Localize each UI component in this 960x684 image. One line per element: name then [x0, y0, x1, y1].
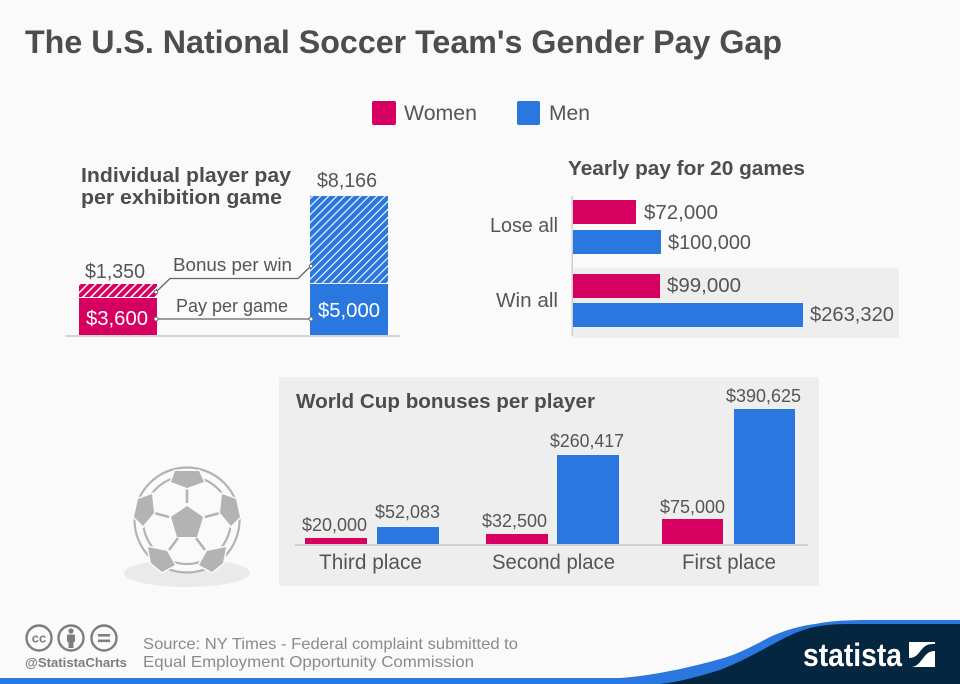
- men stacked bar: $5,000: [318, 300, 380, 322]
- heading: exhibition game: per exhibition game: [81, 187, 282, 209]
- legend: [372, 101, 590, 125]
- callout: bonus per win: Bonus per win: [173, 255, 292, 275]
- heading: exhibition game: Individual player pay: [81, 165, 292, 187]
- title: The U.S. National Soccer Team's Gender Pay Gap: [25, 24, 782, 60]
- women stacked bar: $1,350: [85, 261, 145, 283]
- panel: yearly pay for 20 games: [490, 158, 899, 338]
- row: lose all: $72,000: [644, 202, 718, 224]
- row: lose all: Lose all: [490, 215, 558, 237]
- group: first place: First place: [682, 551, 776, 574]
- footer: source: Source: NY Times - Federal complaint submitted to: [143, 636, 518, 653]
- men stacked bar: $8,166: [317, 170, 377, 192]
- group: second place: [482, 431, 624, 574]
- group: second place: Second place: [492, 551, 615, 574]
- women stacked bar: $3,600: [86, 308, 148, 330]
- callout: bonus per win: [154, 255, 313, 294]
- group: third place: [302, 502, 440, 574]
- row: win all: Win all: [496, 290, 558, 312]
- heading: yearly pay: Yearly pay for 20 games: [568, 158, 805, 180]
- row: win all: $263,320: [810, 304, 894, 326]
- group: second place: $32,500: [482, 511, 547, 531]
- row: lose all: [490, 200, 751, 254]
- group: third place: $20,000: [302, 515, 367, 535]
- heading: exhibition game: [81, 165, 292, 209]
- footer: creative commons icons: [26, 626, 116, 650]
- group: first place: $390,625: [726, 386, 801, 406]
- men stacked bar: [310, 170, 388, 335]
- row: lose all: $100,000: [668, 232, 751, 254]
- group: third place: $52,083: [375, 502, 440, 522]
- logo: statista: statista: [803, 637, 902, 673]
- legend: Men: [549, 102, 590, 125]
- footer: brand band: [0, 620, 960, 684]
- group: first place: [660, 386, 801, 574]
- group: first place: $75,000: [660, 497, 725, 517]
- panel: world cup bonuses per player: [279, 377, 819, 586]
- panel: individual player pay per exhibition game: [65, 165, 400, 337]
- group: third place: Third place: [319, 551, 422, 574]
- footer: statista charts handle: @StatistaCharts: [25, 656, 127, 670]
- legend: Women: [404, 102, 477, 125]
- row: win all: $99,000: [667, 275, 741, 297]
- footer: source: [143, 636, 518, 671]
- footer: creative commons icons: cc: [32, 630, 46, 646]
- footer: source: Equal Employment Opportunity Commission: [143, 654, 474, 671]
- icon: soccer ball: [124, 467, 250, 587]
- heading: world cup: World Cup bonuses per player: [296, 391, 595, 413]
- callout: pay per game: [154, 296, 313, 321]
- row: win all: [496, 274, 894, 327]
- women stacked bar: [79, 261, 157, 335]
- callout: pay per game: Pay per game: [176, 296, 288, 316]
- group: second place: $260,417: [550, 431, 624, 451]
